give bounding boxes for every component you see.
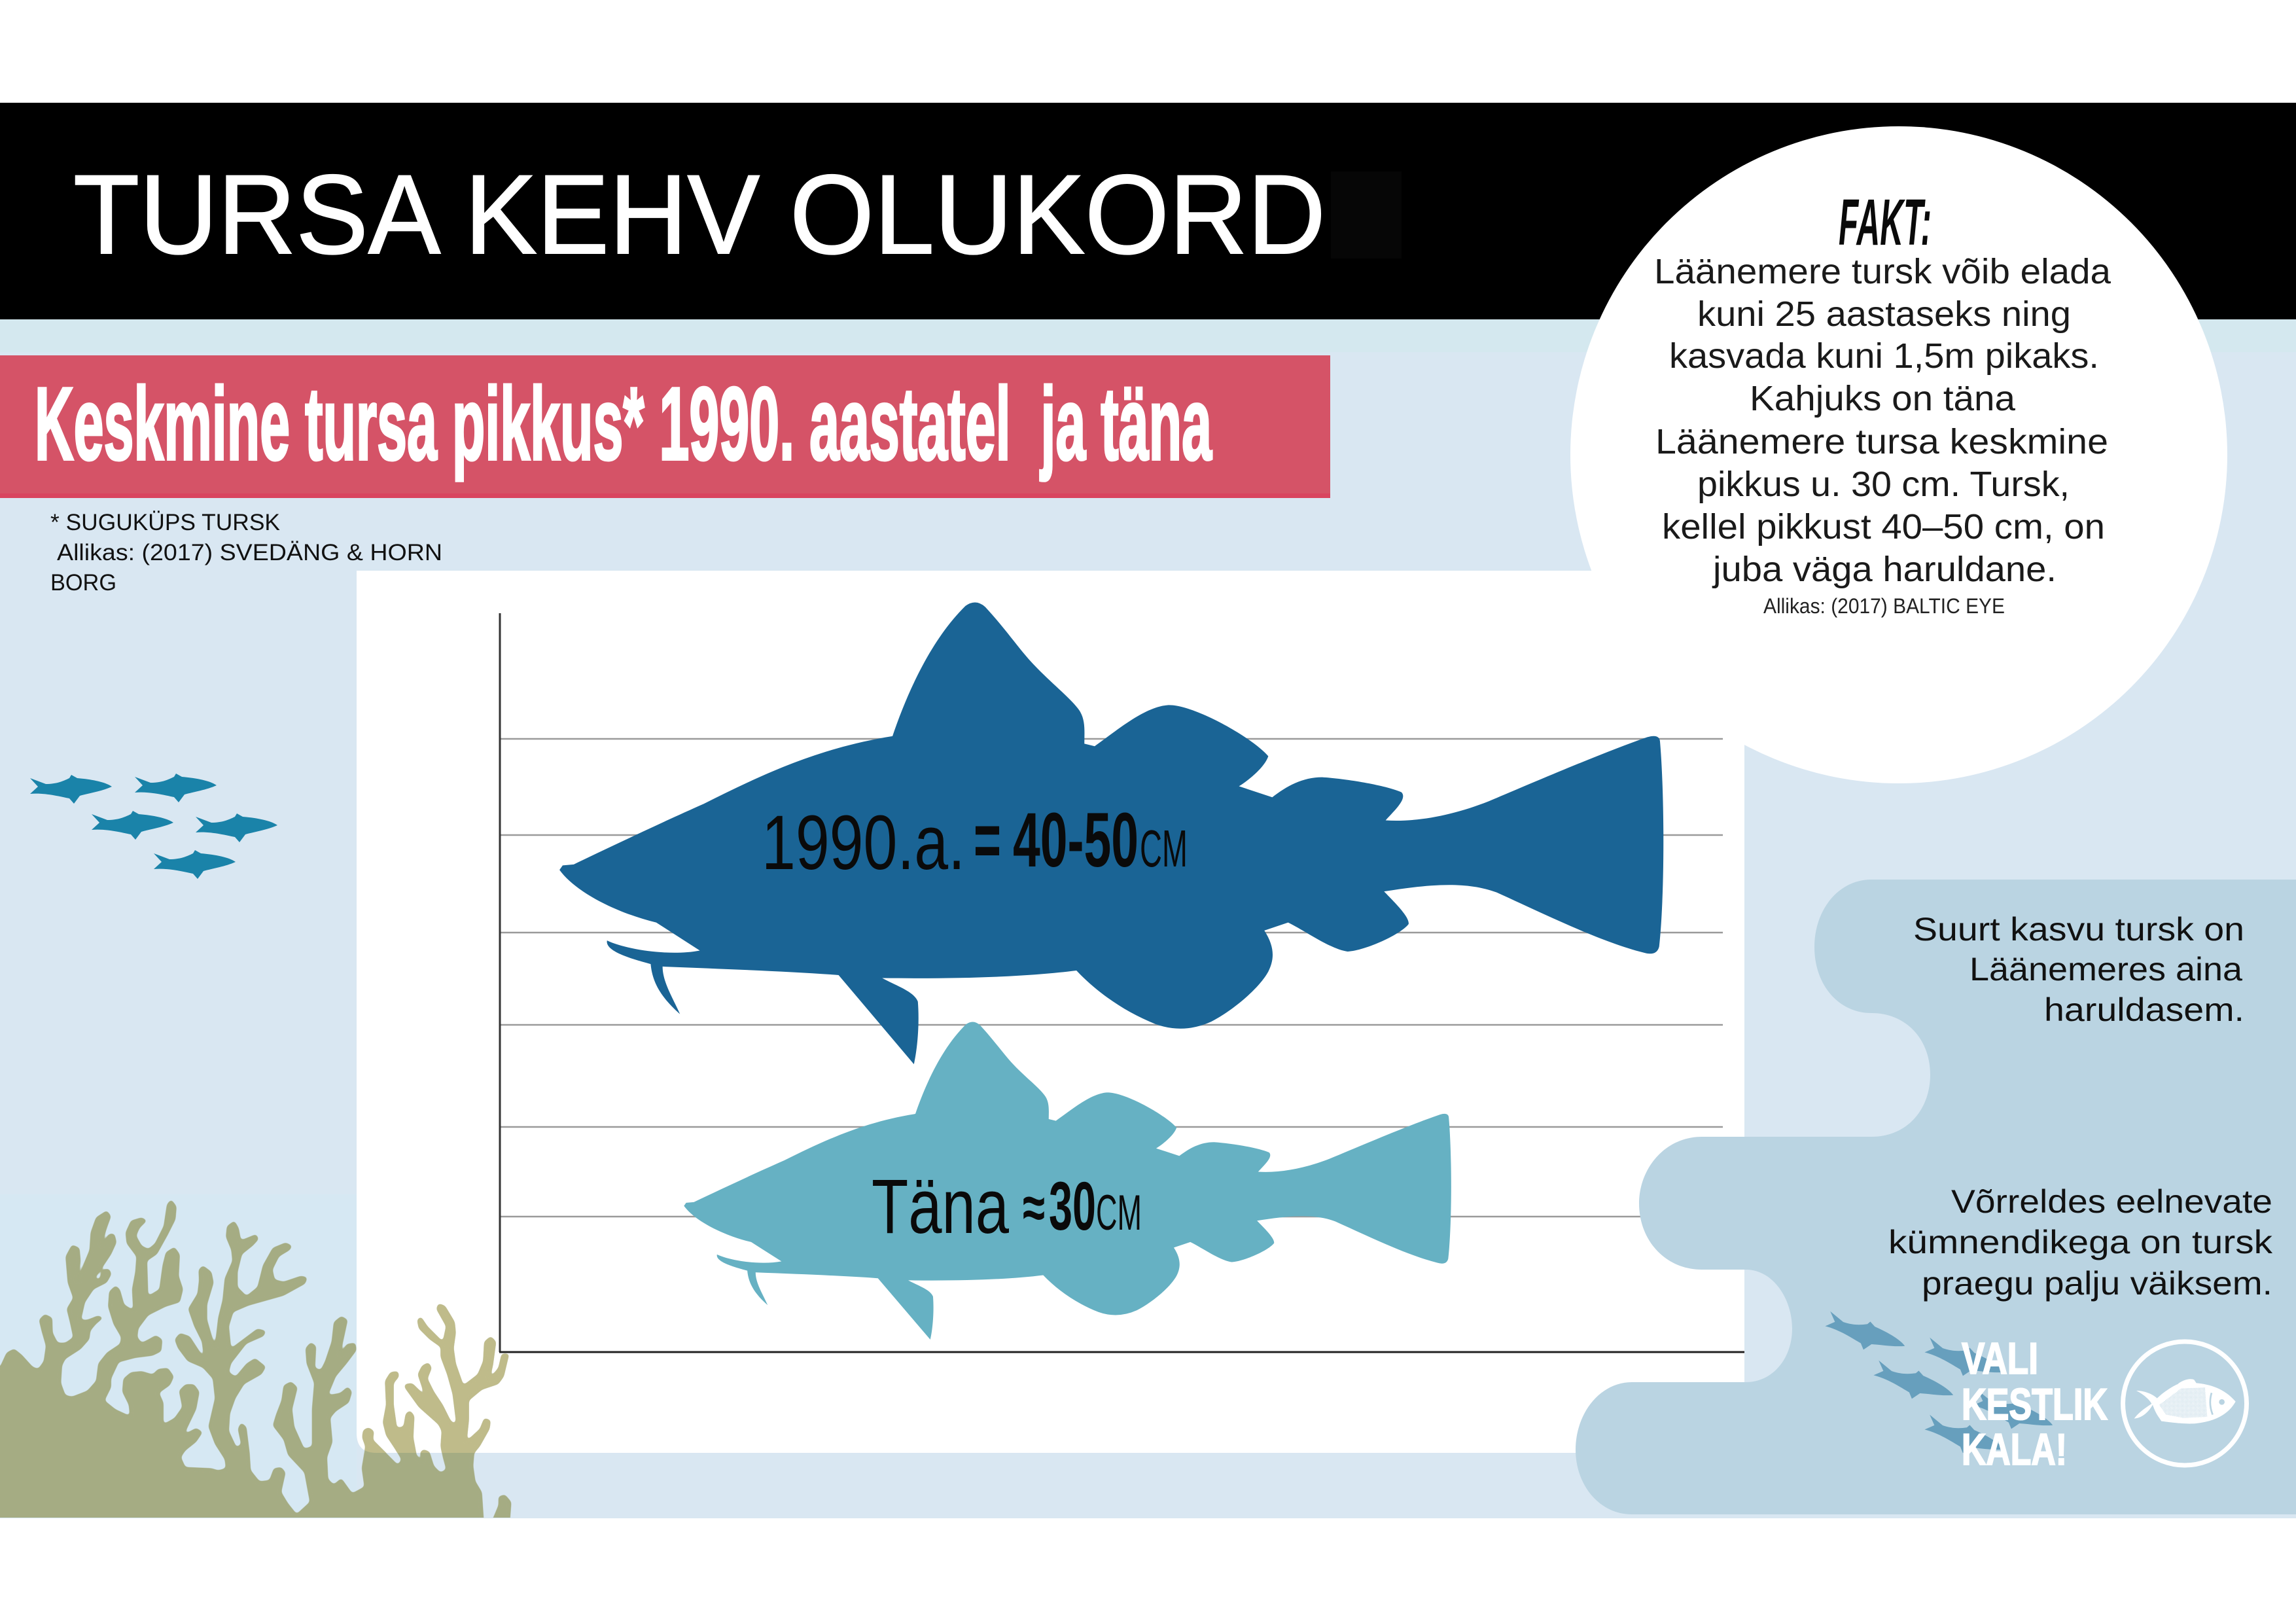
text: cod smaller: praegu palju väiksem. — [1922, 1265, 2272, 1302]
logo text: KALA! — [1962, 1425, 2067, 1474]
text: cod smaller: Võrreldes eelnevate — [1951, 1183, 2272, 1220]
header band — [0, 103, 2296, 319]
panel: chart background — [357, 571, 1744, 1453]
fact text: Läänemere tursa keskmine — [1655, 422, 2108, 461]
coral: lighter tone over chart panel — [362, 1304, 509, 1453]
background: sea — [0, 319, 2296, 1518]
source note: Allikas: (2017) SVEDÄNG & HORN — [57, 540, 442, 565]
icon: school of small fish, left — [30, 774, 277, 879]
text: big cod rarer: Läänemeres aina — [1969, 951, 2242, 988]
label: today's length: Täna — [872, 1164, 1009, 1250]
fact text — [1654, 252, 2111, 589]
panel: right wave blob — [1576, 880, 2296, 1514]
fact text: juba väga haruldane. — [1712, 550, 2057, 589]
logo text — [1962, 1334, 2108, 1474]
panel: fact circle: FAKT: — [1839, 186, 1932, 259]
label: 1990 length: 40-50 — [1013, 797, 1139, 883]
icon: school of small fish, right — [1822, 1308, 2057, 1465]
subtitle text: Keskmine tursa pikkus* 1990. aastatel ja täna — [35, 366, 1212, 482]
label: 1990 length — [762, 797, 1188, 886]
fish: 1990s cod — [559, 603, 1663, 1064]
source note: BORG — [50, 570, 116, 596]
fact text: pikkus u. 30 cm. Tursk, — [1697, 465, 2070, 504]
fact text: Kahjuks on täna — [1750, 379, 2016, 418]
label: 1990 length: 1990.a. — [762, 800, 965, 886]
logo text: VALI — [1962, 1334, 2038, 1383]
label: 1990 length: CM — [1140, 819, 1188, 878]
logo icon: fish in circle — [2123, 1342, 2247, 1465]
label: today's length: ≈ — [1023, 1175, 1045, 1241]
label: today's length: 30 — [1049, 1168, 1096, 1245]
text: big cod rarer: Suurt kasvu tursk on — [1913, 911, 2244, 948]
chart: gridlines and axes — [499, 613, 1744, 1352]
source note — [50, 510, 442, 596]
panel: fact circle — [1570, 126, 2227, 783]
text: big cod rarer — [1913, 911, 2244, 1028]
fact text: kuni 25 aastaseks ning — [1697, 294, 2071, 334]
logo text: KESTLIK — [1962, 1380, 2108, 1429]
label: today's length — [872, 1164, 1142, 1250]
fact text: Läänemere tursk võib elada — [1654, 252, 2111, 291]
fact text: kasvada kuni 1,5m pikaks. — [1669, 336, 2099, 376]
fish: today's cod — [684, 1022, 1451, 1340]
text: cod smaller — [1888, 1183, 2273, 1302]
coral reef — [0, 1199, 512, 1531]
title: TURSA KEHV OLUKORD — [73, 152, 1326, 277]
source note: * SUGUKÜPS TURSK — [50, 510, 280, 535]
fact source: Allikas: (2017) BALTIC EYE — [1763, 594, 2005, 618]
text: big cod rarer: haruldasem. — [2044, 991, 2244, 1028]
label: today's length: CM — [1096, 1185, 1142, 1241]
subtitle banner — [0, 355, 1330, 498]
text: cod smaller: kümnendikega on tursk — [1888, 1224, 2273, 1260]
label: 1990 length: = — [974, 797, 1001, 883]
fact text: kellel pikkust 40–50 cm, on — [1662, 507, 2105, 546]
